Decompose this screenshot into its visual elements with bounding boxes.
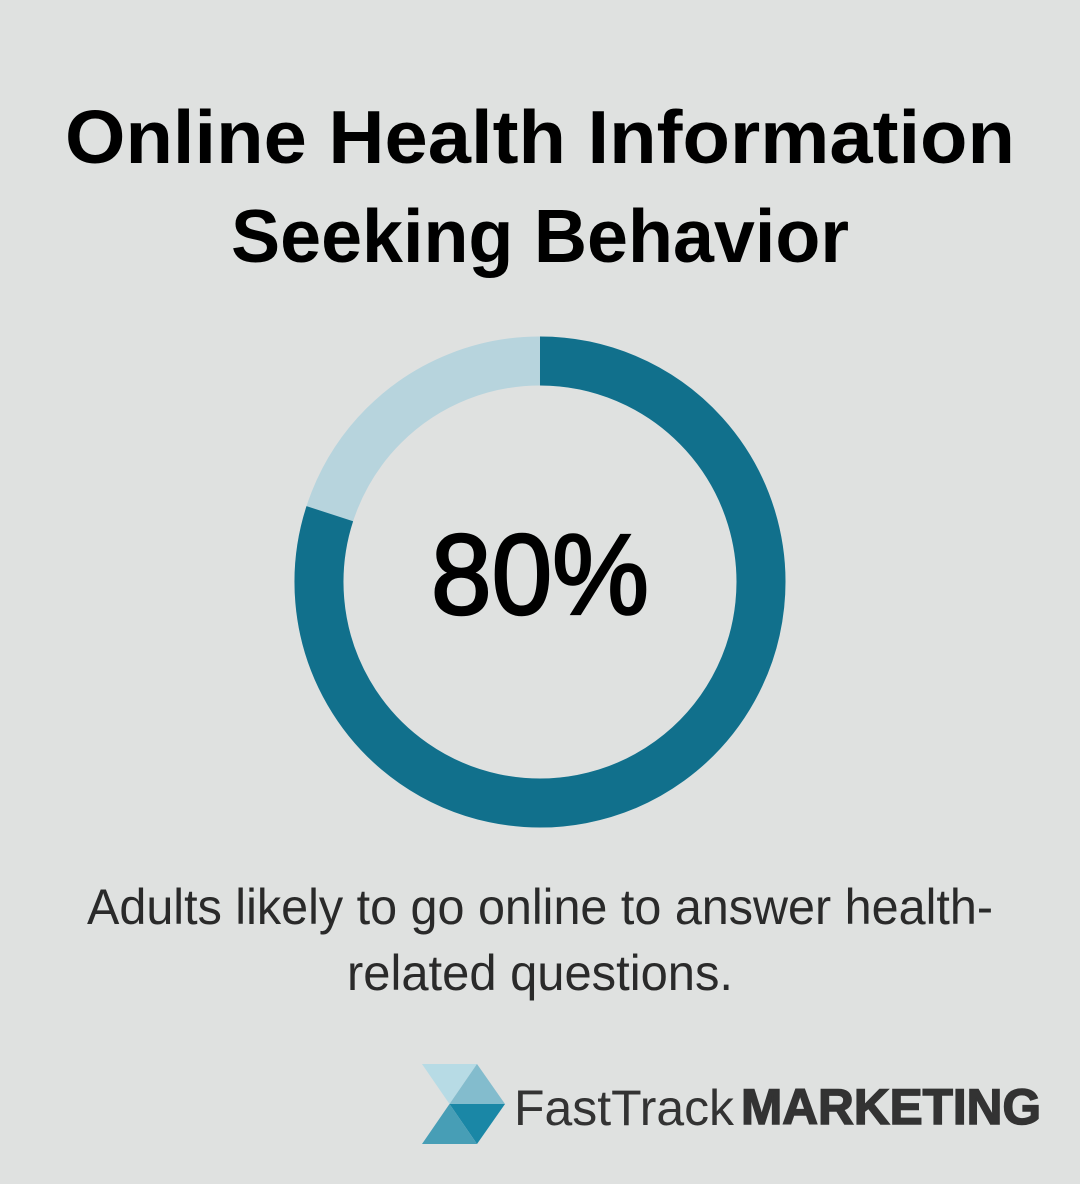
logo wordmark: FastTrack — [514, 1080, 735, 1136]
icon: logo triangles — [422, 1064, 505, 1144]
title: Online Health Information — [65, 95, 1015, 179]
big number: 80% — [431, 512, 649, 639]
logo: FastTrack Marketing — [422, 1064, 1041, 1144]
title — [65, 95, 1015, 278]
description text: Adults likely to go online to answer health- — [87, 879, 993, 935]
description text: related questions. — [347, 945, 733, 1001]
donut chart: 80% — [319, 361, 761, 803]
title: Seeking Behavior — [231, 194, 849, 278]
logo wordmark: MARKETING — [741, 1079, 1041, 1135]
logo wordmark — [514, 1079, 1041, 1136]
description text — [87, 879, 993, 1001]
